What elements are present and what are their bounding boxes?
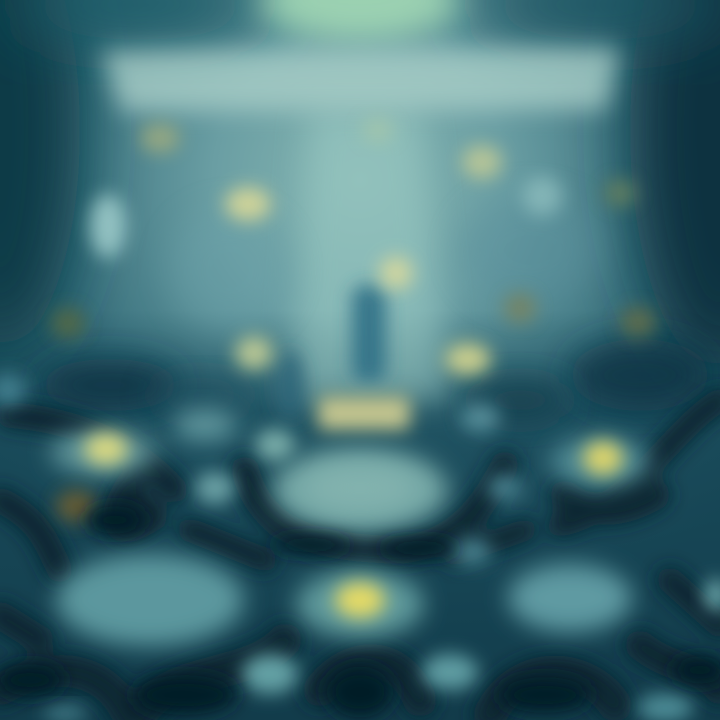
left small disc with yellow node [50,429,158,475]
top light glow [260,0,460,40]
bottom centre disc with yellow node [296,570,424,638]
right small disc with yellow node [550,437,650,487]
central label plate [318,396,410,430]
orange node [56,490,96,522]
branching dark network lines [0,400,720,720]
small discs [0,374,720,720]
bottom right large disc [508,564,632,632]
center disc [272,448,448,532]
deep shadows at the bottom [0,506,720,718]
upper side panels [90,176,600,330]
central figure [276,285,386,419]
title banner [102,48,620,112]
dark shadows mid band [40,339,710,422]
bottom left large disc [56,554,244,646]
yellow nodes [51,118,656,375]
light shaft [290,110,450,400]
